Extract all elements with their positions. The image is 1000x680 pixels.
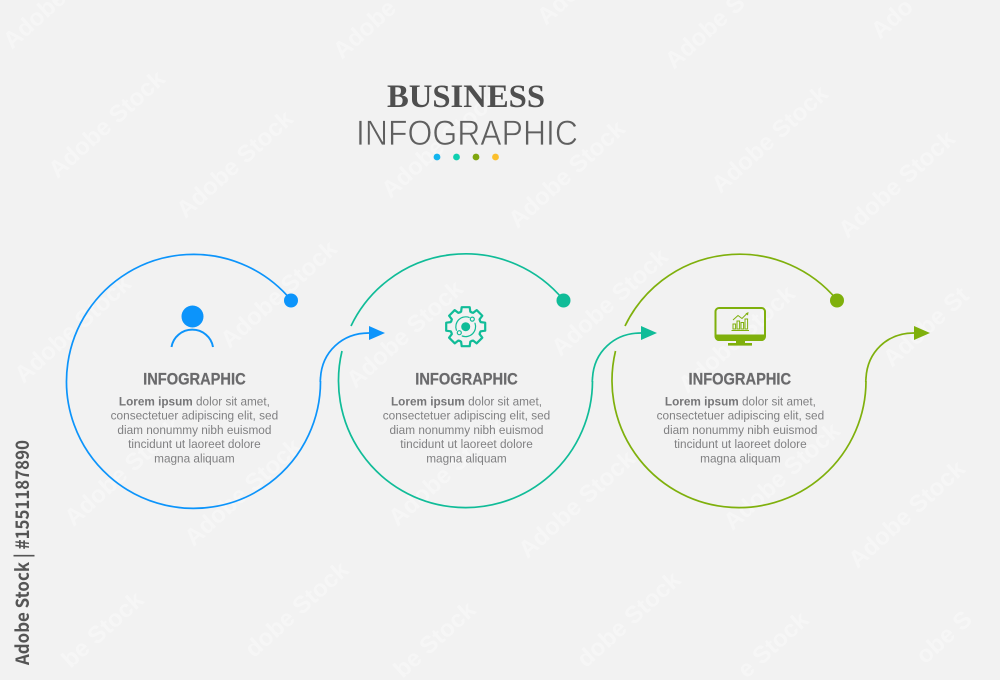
watermark pattern: Adobe Stock [383, 413, 511, 532]
title dots [434, 154, 499, 160]
watermark pattern: Adobe Stock [503, 115, 631, 234]
body text: tincidunt ut laoreet dolore [400, 437, 533, 451]
body text [657, 394, 824, 465]
vertical stock id text: Adobe Stock | #1551187890 [9, 440, 35, 666]
title block [356, 79, 578, 160]
watermark pattern: Adobe Stock [179, 433, 307, 552]
body text: tincidunt ut laoreet dolore [128, 437, 261, 451]
watermark pattern: dobe Stock [572, 566, 686, 673]
body text: Lorem ipsum dolor sit amet, [391, 394, 542, 408]
ring upper arc: teal [351, 254, 564, 326]
ring and arrow line: blue [67, 254, 369, 508]
body text: magna aliquam [700, 451, 781, 465]
arrowhead [369, 326, 385, 340]
body text: Lorem ipsum dolor sit amet, [665, 394, 816, 408]
body text: magna aliquam [426, 451, 507, 465]
body text: diam nonummy nibh euismod [117, 423, 271, 437]
watermark pattern: Adobe Stock [673, 280, 801, 399]
body text: diam nonummy nibh euismod [663, 423, 817, 437]
heading: INFOGRAPHIC [689, 370, 791, 388]
watermark pattern: Adobe Stock [171, 105, 299, 224]
ring upper arc: green [625, 254, 837, 326]
watermark pattern: Adobe Stock [718, 417, 846, 536]
ring lower arc and arrow line: green [612, 333, 914, 508]
body text: Lorem ipsum dolor sit amet, [119, 394, 270, 408]
watermark pattern: Adobe Stock [843, 455, 971, 574]
watermark pattern: be Stock [57, 586, 149, 673]
body text: consectetuer adipiscing elit, sed [383, 409, 550, 423]
panel: step 3 [612, 254, 930, 508]
watermark pattern: Adobe St [878, 282, 974, 372]
watermark pattern: Adobe Stock [59, 413, 187, 532]
arrowhead [641, 326, 657, 340]
arrowhead [914, 326, 930, 340]
watermark pattern: Adobe Stock [513, 445, 641, 564]
body text [383, 394, 550, 465]
panel: step 1 [67, 254, 385, 508]
watermark pattern: Adobe Stock [341, 275, 469, 394]
body text [111, 394, 278, 465]
watermark pattern: obe S [911, 606, 978, 669]
body text: consectetuer adipiscing elit, sed [111, 409, 278, 423]
body text: magna aliquam [154, 451, 235, 465]
body text: diam nonummy nibh euismod [390, 423, 544, 437]
watermark pattern: Adobe Stock [706, 80, 834, 199]
heading: INFOGRAPHIC [143, 370, 246, 388]
watermark pattern: dobe Stock [240, 556, 354, 663]
body text: consectetuer adipiscing elit, sed [657, 409, 824, 423]
end dot [284, 294, 298, 308]
watermark pattern: Adobe Stock [546, 243, 674, 362]
heading: INFOGRAPHIC: INFOGRAPHIC [356, 114, 578, 153]
watermark pattern: Adobe Stock [43, 65, 171, 184]
icon: monitor with chart [715, 308, 766, 346]
watermark pattern: Adobe Stock [9, 270, 137, 389]
body text: tincidunt ut laoreet dolore [674, 437, 807, 451]
icon: gear [446, 307, 485, 346]
end dot [556, 294, 570, 308]
watermark pattern: Adobe Stock [833, 125, 961, 244]
icon: person [172, 306, 213, 347]
panel: step 2 [339, 254, 657, 508]
heading: BUSINESS: BUSINESS [387, 79, 545, 115]
end dot [830, 294, 844, 308]
ring lower arc and arrow line: teal [339, 333, 641, 508]
heading: INFOGRAPHIC [415, 370, 518, 388]
watermark pattern: Adobe Stock [376, 85, 504, 204]
watermark pattern: Adobe Stock [215, 235, 343, 354]
